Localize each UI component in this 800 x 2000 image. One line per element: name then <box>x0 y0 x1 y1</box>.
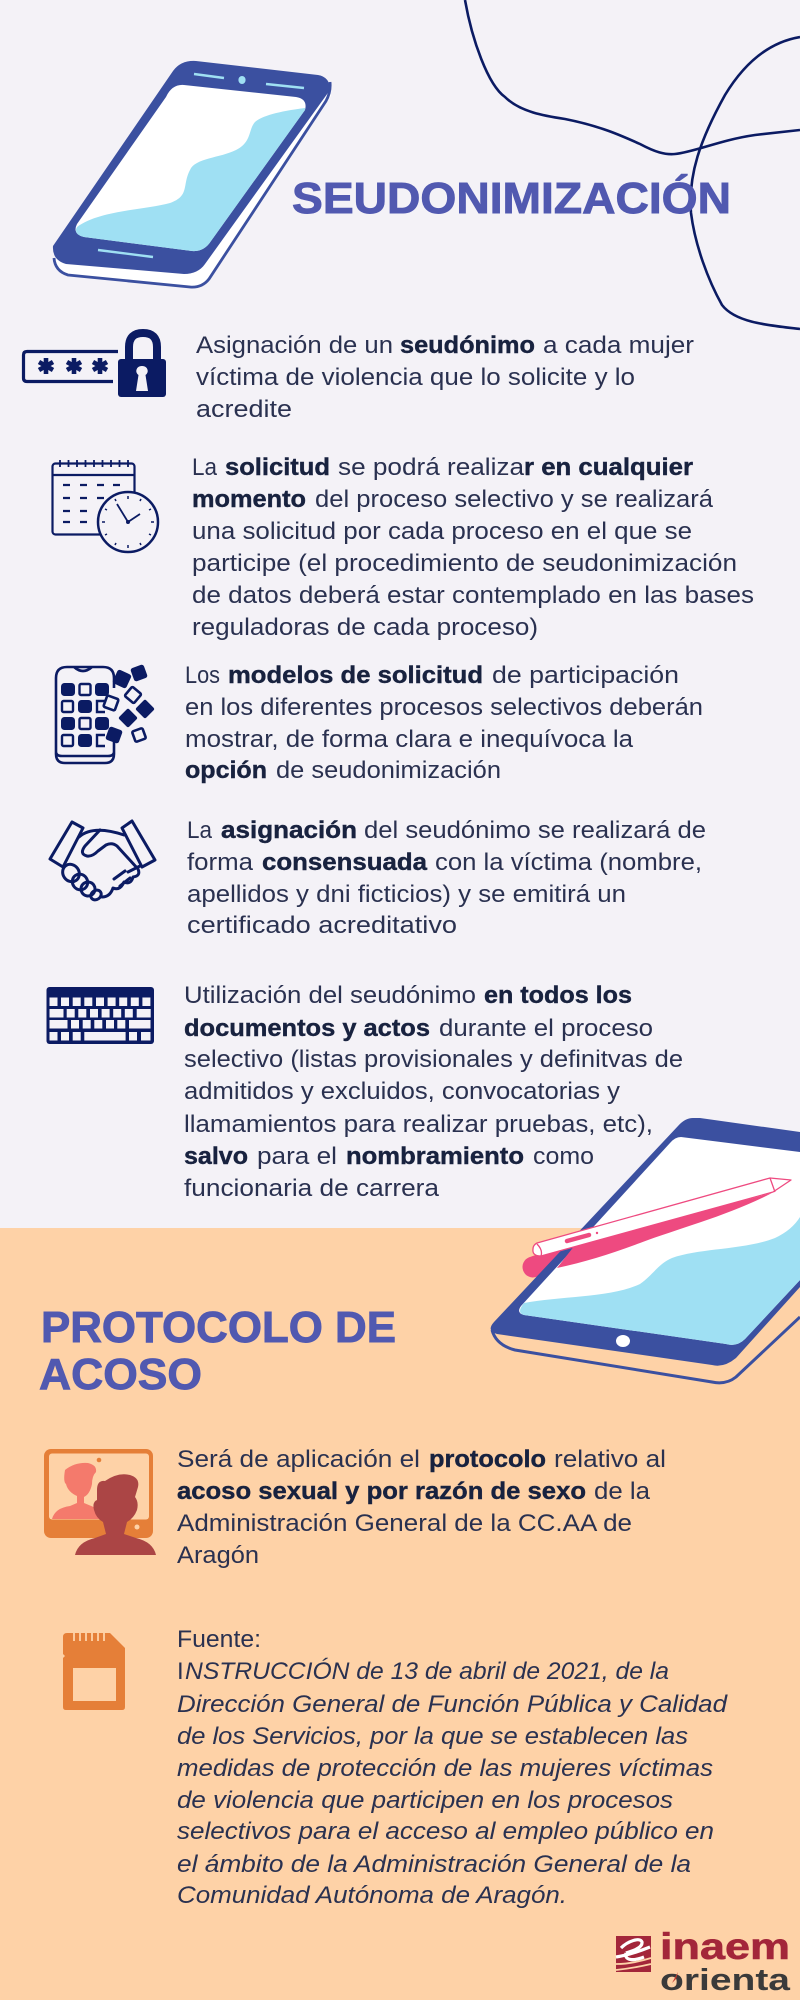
text block: asignación: La <box>187 817 213 844</box>
text block: solicitud: reguladoras de cada proceso) <box>192 614 538 641</box>
text block: fuente: de violencia que participen en los procesos <box>177 1787 673 1814</box>
text block: utilización del seudónimo: nombramiento <box>346 1143 524 1170</box>
text block: modelos de solicitud: Los <box>185 662 220 689</box>
decorative curved lines <box>465 0 800 329</box>
text block: protocolo relativo: acoso sexual y por razón de sexo <box>177 1478 586 1505</box>
text block: fuente: I <box>177 1658 184 1685</box>
heading: protocolo de acoso: ACOSO <box>39 1350 202 1399</box>
heading: seudonimización: SEUDONIMIZACIÓN <box>292 173 731 223</box>
icon: memory card <box>63 1633 125 1710</box>
text block: asignación de seudónimo <box>196 332 694 423</box>
icon: handshake <box>50 821 155 902</box>
text block: protocolo relativo: Aragón <box>177 1542 259 1569</box>
text block: solicitud: una solicitud por cada proceso en el que se <box>192 518 692 545</box>
icon: keyboard <box>46 987 154 1044</box>
text block: utilización del seudónimo: funcionaria de carrera <box>184 1175 440 1202</box>
panel: seudonimización background <box>0 0 800 1228</box>
text block: protocolo relativo <box>177 1446 666 1569</box>
heading: protocolo de acoso: PROTOCOLO DE <box>41 1303 396 1352</box>
text block: utilización del seudónimo <box>184 982 683 1202</box>
text block: utilización del seudónimo: en todos los <box>484 982 632 1009</box>
text block: utilización del seudónimo: como <box>533 1143 594 1170</box>
text block: protocolo relativo: Será de aplicación el <box>177 1446 420 1473</box>
text block: modelos de solicitud: opción <box>185 757 267 784</box>
text block: asignación: consensuada <box>262 849 428 876</box>
text block: protocolo relativo: de la <box>594 1478 651 1505</box>
text block: protocolo relativo: relativo al <box>554 1446 666 1473</box>
text block: asignación <box>187 817 706 939</box>
logo: inaem orienta: orienta <box>660 1962 791 1997</box>
illustration: tablet with stylus <box>491 1118 800 1383</box>
logo: inaem orienta: inaem <box>660 1926 790 1967</box>
icon: phone with app tiles <box>56 664 155 763</box>
text block: utilización del seudónimo: admitidos y excluidos, convocatorias y <box>184 1078 620 1105</box>
text block: utilización del seudónimo: salvo <box>184 1143 248 1170</box>
text block: solicitud: solicitud <box>225 454 330 481</box>
text block: modelos de solicitud: de seudonimización <box>276 757 501 784</box>
text block: utilización del seudónimo: para el <box>257 1143 337 1170</box>
text block: asignación de seudónimo: acredite <box>196 396 292 423</box>
text block: solicitud: del proceso selectivo y se realizará <box>315 486 714 513</box>
text block: modelos de solicitud <box>185 662 703 784</box>
text block: fuente: el ámbito de la Administración General de la <box>177 1851 691 1878</box>
heading: protocolo de acoso <box>39 1303 396 1399</box>
text block: asignación: forma <box>187 849 254 876</box>
text block: protocolo relativo: Administración General de la CC.AA de <box>177 1510 632 1537</box>
text block: asignación de seudónimo: Asignación de un <box>196 332 393 359</box>
text block: modelos de solicitud: de participación <box>492 662 679 689</box>
text block: utilización del seudónimo: selectivo (listas provisionales y definitvas de <box>184 1046 683 1073</box>
text block: modelos de solicitud: en los diferentes procesos selectivos deberán <box>185 694 703 721</box>
text block: asignación de seudónimo: víctima de violencia que lo solicite y lo <box>196 364 635 391</box>
text block: solicitud: momento <box>192 486 306 513</box>
panel: protocolo de acoso background <box>0 1228 800 2000</box>
text block: solicitud: de datos deberá estar contemplado en las bases <box>192 582 754 609</box>
text block: solicitud: se podrá realiza <box>338 454 525 481</box>
illustration: smartphone <box>53 61 331 287</box>
text block: asignación: con la víctima (nombre, <box>435 849 702 876</box>
text block: solicitud: r en cualquier <box>524 454 693 481</box>
text block: fuente: Fuente: <box>177 1626 261 1653</box>
logo: inaem orienta <box>616 1926 791 1997</box>
text block: asignación: asignación <box>221 817 357 844</box>
text block: asignación de seudónimo: seudónimo <box>400 332 535 359</box>
text block: protocolo relativo: protocolo <box>429 1446 546 1473</box>
text block: fuente: selectivos para el acceso al empleo público en <box>177 1818 714 1845</box>
text block: utilización del seudónimo: durante el proceso <box>439 1015 653 1042</box>
text block: fuente: medidas de protección de las mujeres víctimas <box>177 1755 713 1782</box>
text block: solicitud: participe (el procedimiento de seudonimización <box>192 550 737 577</box>
text block: fuente: Comunidad Autónoma de Aragón. <box>177 1882 567 1909</box>
text block: modelos de solicitud: modelos de solicitud <box>228 662 483 689</box>
text block: solicitud <box>192 454 754 641</box>
text block: modelos de solicitud: mostrar, de forma clara e inequívoca la <box>185 726 634 753</box>
text block: asignación: del seudónimo se realizará de <box>364 817 706 844</box>
text block: asignación: apellidos y dni ficticios) y se emitirá un <box>187 881 626 908</box>
text block: utilización del seudónimo: documentos y actos <box>184 1015 430 1042</box>
text block: fuente <box>177 1626 728 1909</box>
text block: fuente: Dirección General de Función Pública y Calidad <box>177 1691 728 1718</box>
text block: utilización del seudónimo: llamamientos para realizar pruebas, etc), <box>184 1111 653 1138</box>
text block: fuente: NSTRUCCIÓN de 13 de abril de 2021, de la <box>185 1658 669 1685</box>
text block: solicitud: La <box>192 454 218 481</box>
text block: fuente: de los Servicios, por la que se establecen las <box>177 1723 688 1750</box>
text block: asignación de seudónimo: a cada mujer <box>543 332 694 359</box>
text block: asignación: certificado acreditativo <box>187 912 457 939</box>
icon: monitor with two people <box>44 1449 156 1555</box>
icon: password and padlock <box>24 333 166 397</box>
icon: calendar and clock <box>52 460 158 552</box>
text block: utilización del seudónimo: Utilización del seudónimo <box>184 982 476 1009</box>
